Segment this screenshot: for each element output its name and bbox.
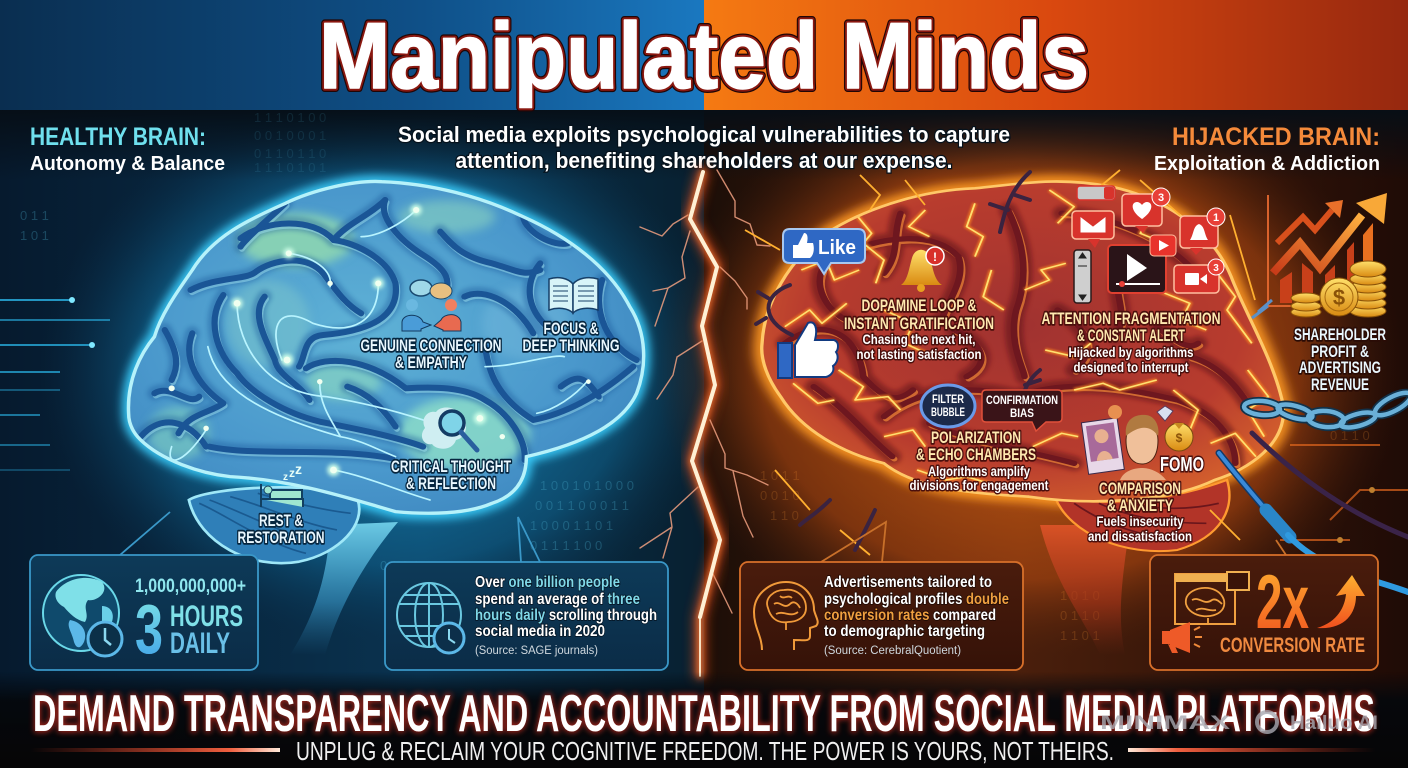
body text: psychological profiles double: [824, 591, 1009, 608]
lightning bolt divider: [640, 170, 770, 676]
icon: wire globe with clock: [397, 583, 464, 653]
binary background left: 0 0 1 1 0 0 0 1 1: [535, 498, 629, 513]
binary background right: [760, 428, 1370, 643]
binary background right: 1 1 0: [770, 508, 799, 523]
binary header strip: 1 1 1 0 1 0 1: [254, 160, 326, 175]
cerebrum: [762, 181, 1283, 501]
stat panel: psychological ads: [740, 562, 1023, 670]
label: attention fragmentation: Hijacked by algorithms: [1068, 345, 1194, 360]
watermark: MINIMAX: [1100, 713, 1231, 734]
glow behind hijacked brain: [655, 80, 1405, 660]
title: Manipulated Minds: [319, 3, 1089, 108]
icon: filter bubble: FILTER: [932, 392, 964, 406]
neural pathways: [170, 210, 588, 500]
header band right: [704, 0, 1408, 110]
label: shareholder profit: [1294, 325, 1386, 394]
watermark: [1100, 712, 1378, 734]
watermark: Hailuo AI: [1290, 713, 1378, 734]
binary header strip: [254, 110, 326, 175]
binary background left: 1 0 1: [20, 228, 49, 243]
circuit lines left: [0, 297, 110, 470]
binary background left: 1 0 0 1 0 1 0 0 0: [540, 478, 634, 493]
icon: sleeping in bed: z: [295, 461, 302, 477]
body text: hours daily scrolling through: [475, 607, 657, 624]
label: polarization: divisions for engagement: [910, 478, 1049, 493]
label: critical thought: & REFLECTION: [406, 474, 496, 493]
label: shareholder profit: PROFIT &: [1311, 342, 1369, 361]
binary header strip: 0 1 1 0 1 1 0: [254, 146, 326, 161]
thorn vines: [756, 172, 1040, 550]
icon: video player: [1108, 245, 1166, 293]
label: focus and deep thinking: [522, 319, 620, 355]
bottom fade: [0, 672, 1408, 768]
label: polarization: POLARIZATION: [931, 428, 1021, 447]
label: attention fragmentation: & CONSTANT ALERT: [1077, 326, 1185, 345]
notification icons cluster: [1072, 186, 1225, 303]
label: genuine connection: GENUINE CONNECTION: [360, 336, 502, 355]
hijacked brain illustration: [745, 170, 1283, 655]
icon: confirmation bias bubble: BIAS: [1010, 408, 1034, 420]
stat panel: 3 hours daily: [30, 555, 258, 670]
title: Manipulated Minds: [319, 3, 1089, 108]
icon: heart bubble: [1122, 188, 1170, 233]
body text: conversion rates compared: [824, 607, 996, 624]
label: dopamine loop: INSTANT GRATIFICATION: [844, 314, 994, 333]
body text: [824, 574, 1009, 657]
binary header strip: 0 0 1 0 0 0 1: [254, 128, 326, 143]
icon: email bubble: [1072, 211, 1114, 248]
label: focus and deep thinking: DEEP THINKING: [522, 336, 620, 355]
stat panel: 2x conversion rate: [1150, 555, 1378, 670]
icon: alert bell bubble: [1180, 208, 1225, 255]
label: comparison and anxiety: Fuels insecurity: [1096, 514, 1184, 529]
binary background left: 1 0 0 0 1 1 0 1: [530, 518, 613, 533]
hijacked brain heading: Exploitation & Addiction: [1154, 153, 1380, 175]
label: focus and deep thinking: FOCUS &: [544, 319, 598, 338]
icon: notification pill: [1077, 186, 1115, 200]
healthy brain heading: [30, 123, 225, 175]
icon: heart bubble: 3: [1158, 192, 1164, 204]
label: rest and restoration: RESTORATION: [238, 528, 324, 547]
binary background left: 0 1 0 1: [380, 558, 420, 573]
binary background right: 0 0 1 0: [760, 488, 800, 503]
header band left: [0, 0, 704, 110]
icon: play button small: [1150, 235, 1176, 256]
icon: video camera: 3: [1213, 263, 1219, 274]
binary background right: 1 0 1 1: [760, 468, 800, 483]
circuit lines right: [1280, 445, 1408, 543]
label: critical thought: CRITICAL THOUGHT: [391, 457, 511, 476]
red line right: [1128, 748, 1376, 752]
glow behind healthy brain: [40, 100, 730, 640]
icon: profit chart and coins: [1252, 193, 1387, 318]
label: critical thought: [391, 457, 511, 493]
icon: head with brain: [754, 582, 818, 650]
icon: like bubble: Like: [818, 237, 856, 259]
call to action subline: UNPLUG & RECLAIM YOUR COGNITIVE FREEDOM. THE POWER IS YOURS, NOT THEIRS.: [296, 736, 1114, 766]
body text: (Source: SAGE journals): [475, 645, 598, 657]
icon: comparison portrait: [1081, 405, 1166, 480]
icon: open book: [549, 278, 598, 313]
icon: confirmation bias bubble: CONFIRMATION: [986, 395, 1058, 407]
cerebrum: [128, 181, 644, 513]
label: comparison and anxiety: COMPARISON: [1099, 479, 1181, 498]
icon: genuine connection: [402, 280, 461, 331]
label: FOMO: FOMO: [1160, 454, 1204, 476]
icon: ad window with megaphone: [1162, 572, 1249, 653]
binary background left: 0 1 1 1 1 0 0: [530, 538, 602, 553]
big number text: HOURS: [170, 600, 243, 633]
icon: alert bell bubble: 1: [1213, 212, 1219, 224]
hijacked brain heading: HIJACKED BRAIN:: [1172, 123, 1380, 151]
label: polarization: Algorithms amplify: [928, 464, 1030, 479]
healthy brain heading: Autonomy & Balance: [30, 153, 225, 175]
label: dopamine loop: Chasing the next hit,: [862, 332, 976, 347]
body text: Over one billion people: [475, 574, 620, 591]
binary background left: 0 1 1: [20, 208, 49, 223]
callout pointers: [120, 512, 1286, 562]
binary background right: 1 0 1 0: [1060, 588, 1100, 603]
label: polarization: & ECHO CHAMBERS: [916, 445, 1036, 464]
brain outer glow: [128, 181, 644, 513]
label: rest and restoration: [238, 511, 324, 547]
icon: earth with clock: [43, 575, 122, 656]
healthy brain heading: HEALTHY BRAIN:: [30, 123, 206, 151]
glowing nodes: [232, 205, 486, 476]
body text: [475, 574, 657, 657]
label: comparison and anxiety: and dissatisfaction: [1088, 529, 1192, 544]
icon: sleeping in bed: z: [283, 472, 288, 483]
label: comparison and anxiety: [1088, 479, 1192, 544]
binary background right: 1 1 0 1: [1060, 628, 1100, 643]
big number text: 1,000,000,000+: [135, 576, 246, 597]
label: genuine connection: [360, 336, 502, 372]
icon: filter bubble: [921, 385, 975, 427]
icon: scrollbar: [1074, 250, 1091, 303]
brain glow: [762, 181, 1283, 501]
big number text: 3: [135, 590, 163, 668]
subtitle: attention, benefiting shareholders at our expense.: [456, 148, 952, 173]
body text: Advertisements tailored to: [824, 574, 992, 591]
body text: to demographic targeting: [824, 623, 985, 640]
label: dopamine loop: [844, 296, 994, 362]
arrow up: [1317, 575, 1365, 628]
label: comparison and anxiety: & ANXIETY: [1107, 496, 1173, 515]
label: dopamine loop: DOPAMINE LOOP &: [862, 296, 976, 315]
binary background right: 0 1 1 0: [1060, 608, 1100, 623]
icon: profit chart and coins: $: [1333, 285, 1345, 310]
brain stem: [1040, 525, 1130, 655]
label: attention fragmentation: ATTENTION FRAGMENTATION: [1042, 309, 1220, 328]
label: attention fragmentation: designed to interrupt: [1074, 360, 1189, 375]
big number text: [135, 576, 246, 668]
label: genuine connection: & EMPATHY: [395, 353, 467, 372]
binary background right: 0 1 1 0: [1330, 428, 1370, 443]
icon: blue cables: [1219, 433, 1408, 592]
cerebellum: [189, 487, 359, 563]
healthy brain illustration: [128, 181, 644, 655]
stat panel: one billion people: [385, 562, 668, 670]
icon: chain: [1243, 388, 1408, 430]
icon: sleeping in bed: z: [289, 466, 295, 480]
cerebellum: [1056, 480, 1229, 551]
label: shareholder profit: REVENUE: [1311, 375, 1369, 394]
icon: filter bubble: BUBBLE: [931, 405, 965, 419]
icon: notification bell: [901, 247, 944, 292]
body text: (Source: CerebralQuotient): [824, 645, 961, 657]
icon: like bubble: [783, 229, 865, 274]
title: Manipulated Minds: [319, 3, 1089, 108]
subtitle: [398, 122, 1010, 173]
icon: money bag: $: [1176, 431, 1183, 445]
icon: sleeping in bed: [261, 461, 303, 507]
icon: video camera: [1174, 259, 1224, 293]
icon: money bag: [1165, 423, 1193, 451]
icon: thumbs up: [778, 322, 838, 378]
label: rest and restoration: REST &: [259, 511, 303, 530]
icon: notification bell: !: [933, 250, 937, 264]
body text: social media in 2020: [475, 623, 605, 640]
binary background left: [20, 208, 634, 573]
label: polarization: [910, 428, 1049, 493]
subtitle: Social media exploits psychological vulnerabilities to capture: [398, 122, 1010, 147]
red line left: [30, 748, 280, 752]
big 2x: 2x: [1256, 560, 1309, 645]
brain stem: [290, 522, 398, 655]
external electric sparks: [745, 170, 1255, 555]
big number text: DAILY: [170, 627, 230, 660]
label: dopamine loop: not lasting satisfaction: [856, 347, 982, 362]
icon: gem: [1157, 406, 1173, 421]
label: attention fragmentation: [1042, 309, 1220, 375]
icon: magnifier critical thought: [422, 408, 477, 450]
binary header strip: 1 1 1 0 1 0 0: [254, 110, 326, 125]
body text: spend an average of three: [475, 591, 640, 608]
icon: confirmation bias bubble: [982, 390, 1062, 431]
hijacked brain heading: [1154, 123, 1380, 175]
